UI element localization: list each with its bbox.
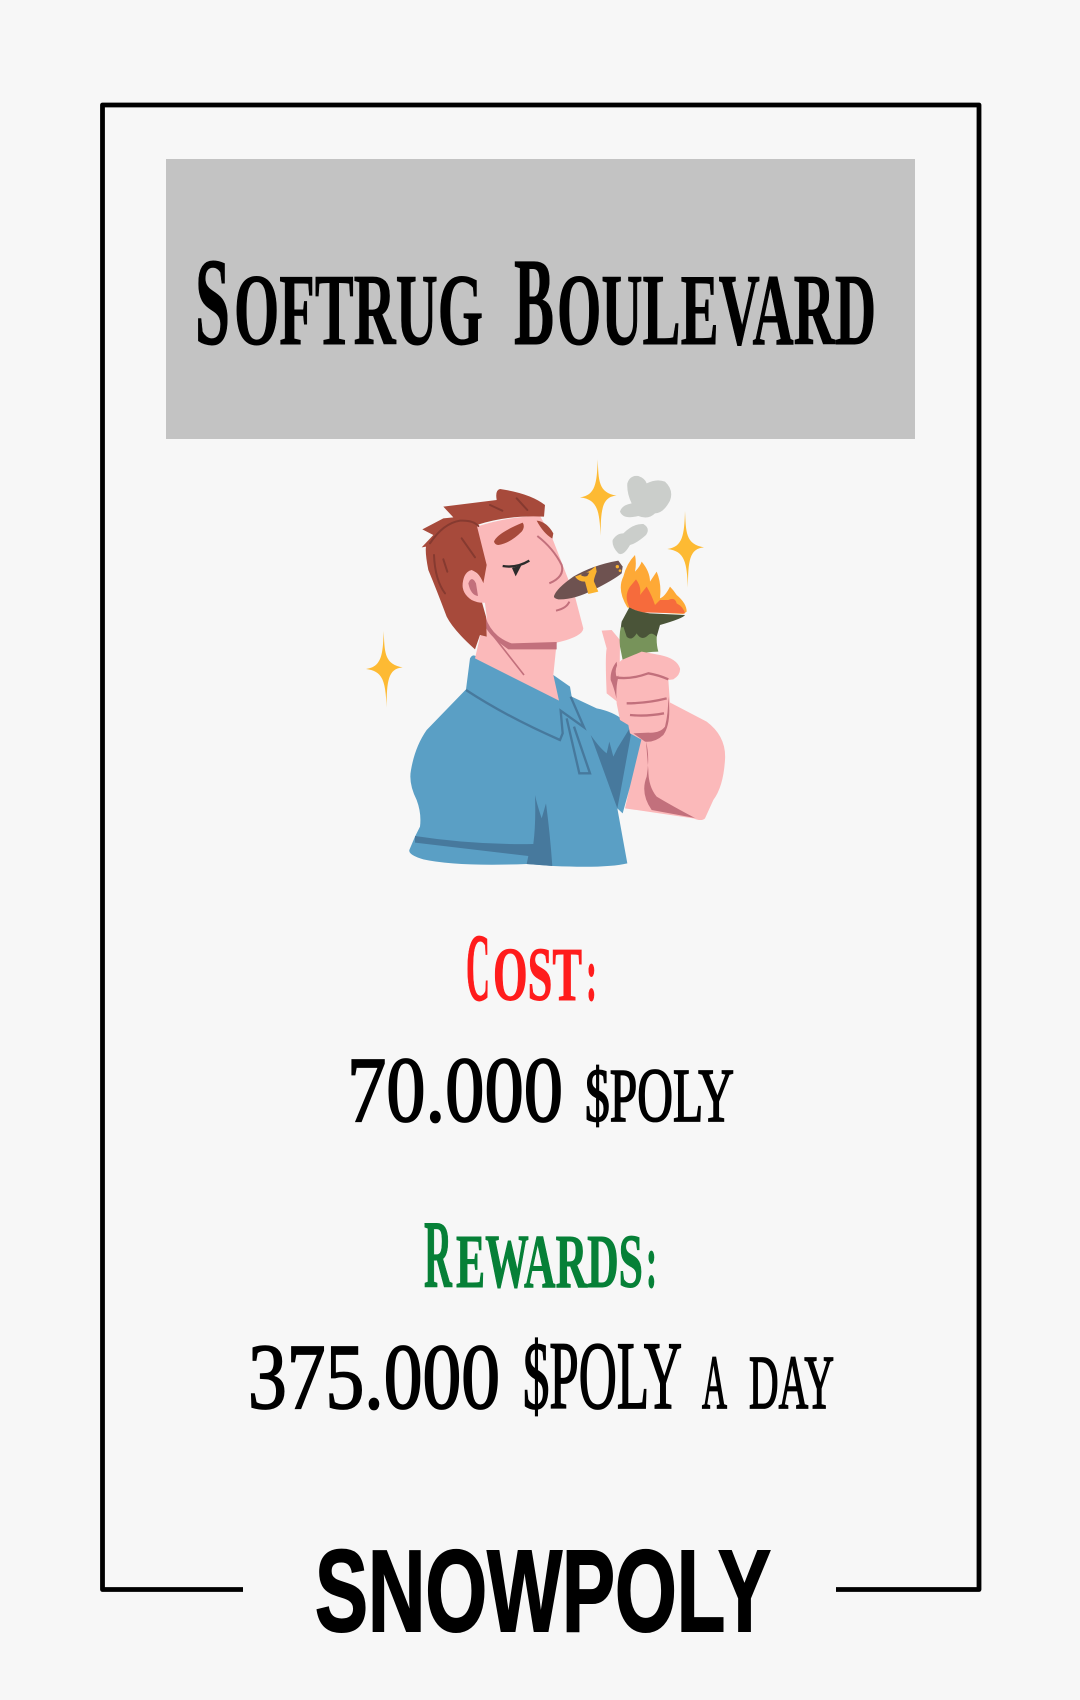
- rewards value: A: [702, 1341, 727, 1425]
- title: [195, 234, 876, 372]
- rewards heading: R: [424, 1201, 453, 1308]
- forearm: [625, 702, 725, 820]
- cigar: [554, 561, 623, 599]
- cost heading: OST: [493, 933, 582, 1017]
- head and neck: [422, 489, 583, 701]
- title banner: [166, 159, 915, 439]
- rewards value: DAY: [749, 1341, 834, 1425]
- cost value: 70.000: [347, 1039, 563, 1142]
- closed eye: [503, 561, 529, 567]
- card: :: [646, 1220, 657, 1304]
- ear: [463, 570, 485, 603]
- title: B: [514, 234, 554, 372]
- title: OFTRUG: [234, 254, 483, 367]
- brand wordmark: SNOWPOLY: [315, 1526, 771, 1656]
- cost value: [347, 1039, 734, 1142]
- shirt: [409, 655, 642, 867]
- rewards value: 375.000: [248, 1326, 500, 1429]
- illustration: man smoking a burning banknote cigar: [366, 459, 725, 867]
- frame border: [102, 105, 979, 1590]
- nose and mouth: [537, 536, 569, 611]
- cost heading: [466, 914, 597, 1021]
- eyebrows: [494, 521, 553, 545]
- icon: smoke: [613, 476, 671, 554]
- hair: [422, 489, 545, 649]
- rewards value: [248, 1322, 834, 1429]
- flaming banknote in hand: [602, 555, 687, 742]
- rewards heading: [424, 1201, 657, 1308]
- rewards heading: EWARDS: [456, 1220, 643, 1304]
- cost value: $POLY: [585, 1054, 734, 1138]
- icon: sparkles: [366, 459, 704, 708]
- cost heading: C: [466, 914, 490, 1021]
- title: S: [195, 234, 230, 372]
- card: :: [586, 933, 597, 1017]
- rewards value: $POLY: [523, 1322, 682, 1429]
